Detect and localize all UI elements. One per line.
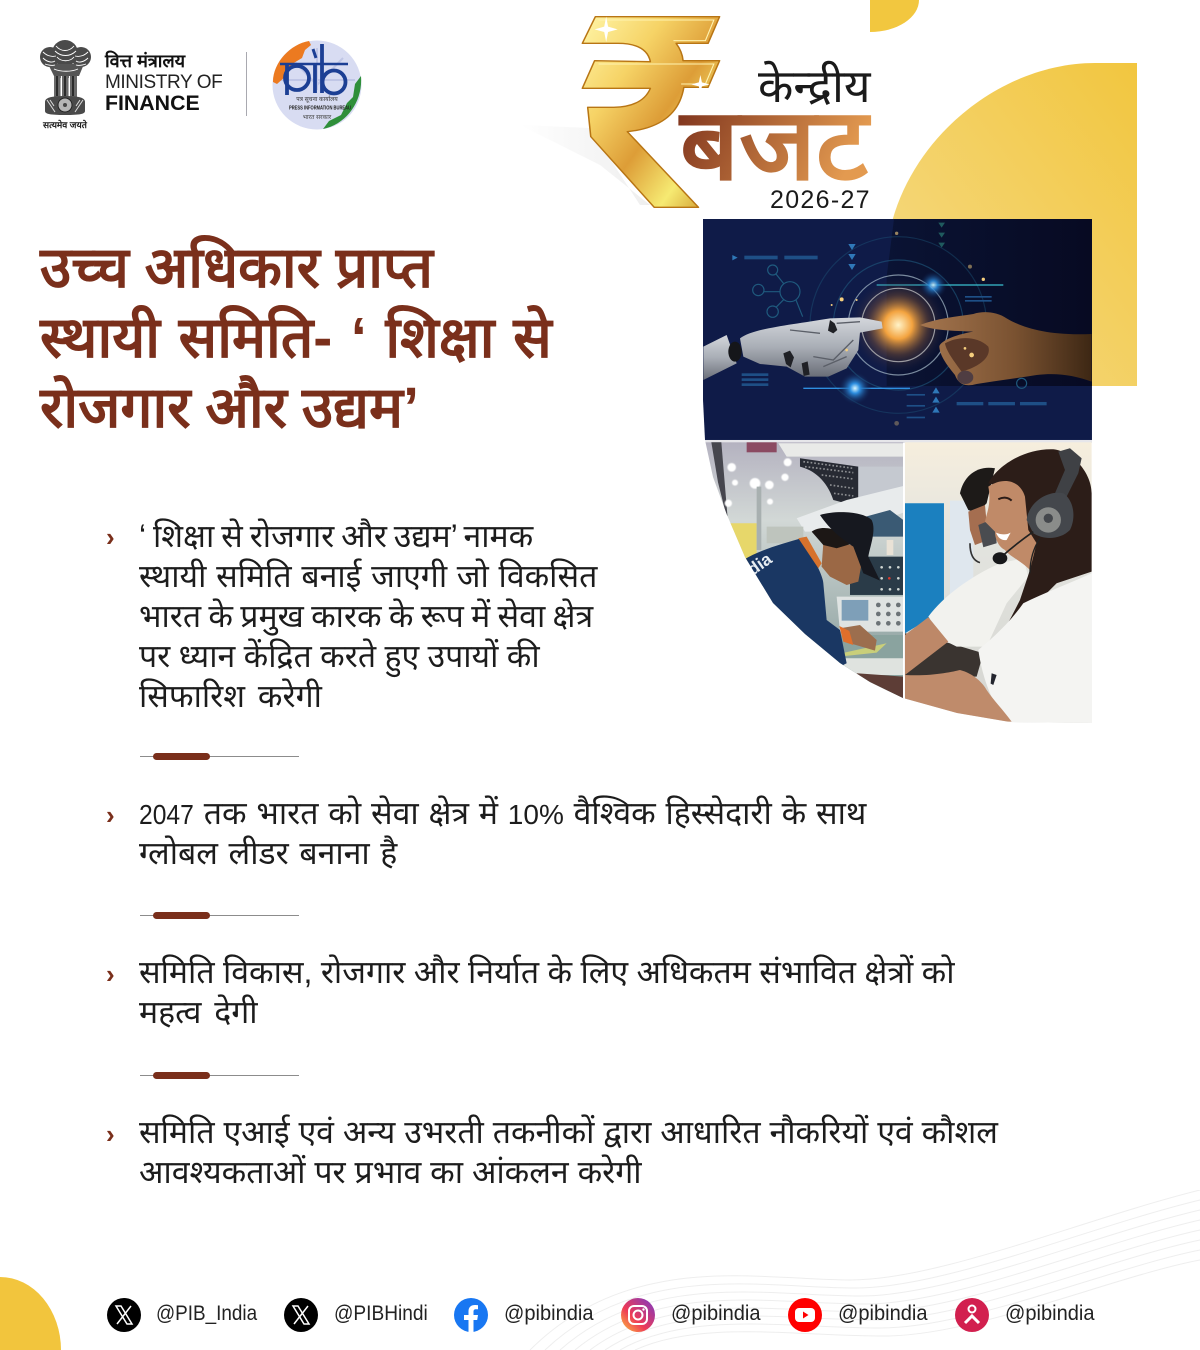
bullet 1 text: ‘ शिक्षा से रोजगार और उद्यम’ नामक — [139, 518, 533, 554]
bullet 3 text: महत्व देगी — [139, 994, 258, 1030]
bullet 3 text: समिति विकास, रोजगार और निर्यात के लिए अधिकतम संभावित क्षेत्रों को — [139, 954, 955, 990]
logo divider — [246, 52, 247, 116]
main title: स्थायी समिति- ‘ शिक्षा से — [40, 306, 552, 370]
bullet 2 text — [139, 795, 867, 871]
icon: gold rupee symbol — [582, 16, 720, 208]
bullet 1 — [106, 518, 598, 714]
divider 2 — [140, 912, 299, 919]
bullet 4 text: आवश्यकताओं पर प्रभाव का आंकलन करेगी — [139, 1154, 642, 1190]
chevron: › — [106, 522, 115, 552]
icon: YouTube — [788, 1298, 822, 1332]
bullet 4 — [106, 1114, 998, 1190]
chevron: › — [106, 800, 115, 830]
icon: Instagram — [621, 1298, 655, 1332]
bullet 1 text: भारत के प्रमुख कारक के रूप में सेवा क्षेत्र — [139, 598, 593, 634]
image: robot and human hands — [703, 219, 1092, 440]
icon: national emblem — [40, 40, 91, 115]
decorative quarter circle behind photos — [892, 63, 1137, 386]
decorative corner shape: bottom left — [0, 1277, 61, 1350]
bullet 4 text — [139, 1114, 998, 1190]
kendriya text: केन्द्रीय — [758, 60, 871, 112]
decorative corner shape: top — [870, 0, 919, 32]
icon: X — [107, 1298, 141, 1332]
icon: X — [284, 1298, 318, 1332]
icon: Koo — [955, 1298, 989, 1332]
bullet 2 text: 2047 — [139, 799, 194, 830]
main title — [39, 235, 554, 440]
handle: Instagram: @pibindia — [671, 1302, 761, 1325]
background wave pattern — [530, 1190, 1200, 1350]
bullet 1 text: सिफारिश करेगी — [139, 678, 322, 714]
bullet 2 — [106, 795, 867, 871]
handle: PIB India: @PIB_India — [156, 1302, 257, 1325]
photo collage — [703, 219, 1092, 723]
handle: Koo: @pibindia — [1005, 1302, 1095, 1325]
handle: PIB Hindi: @PIBHindi — [334, 1302, 428, 1325]
bullet 1 text: स्थायी समिति बनाई जाएगी जो विकसित — [139, 558, 597, 594]
pib logo — [272, 40, 362, 130]
bullet 4 text: समिति एआई एवं अन्य उभरती तकनीकों द्वारा आधारित नौकरियों एवं कौशल — [139, 1114, 998, 1150]
bullet 1 text — [139, 518, 598, 714]
bullet 3 text — [139, 954, 955, 1030]
image: technician at workbench: dia — [743, 548, 776, 579]
bullet 2 text: तक भारत को सेवा क्षेत्र में 10% वैश्विक हिस्सेदारी के साथ — [204, 795, 866, 831]
divider 3 — [140, 1072, 299, 1079]
social media footer — [107, 1298, 1095, 1332]
budget logo — [582, 16, 872, 214]
ministry name hindi: वित्त मंत्रालय — [105, 51, 185, 71]
ministry of finance logo — [40, 40, 222, 130]
pib tagline: पत्र सूचना कार्यालय — [296, 95, 338, 103]
ministry name english: MINISTRY OF — [105, 72, 222, 93]
handle: Facebook: @pibindia — [504, 1302, 594, 1325]
image: technician at workbench — [703, 442, 903, 703]
main title: रोजगार और उद्यम’ — [40, 376, 419, 440]
pib logo: भारत सरकार — [303, 115, 332, 121]
budget year: 2026-27 — [770, 186, 871, 214]
handle: YouTube: @pibindia — [838, 1302, 928, 1325]
main title: उच्च अधिकार प्राप्त — [40, 236, 433, 300]
finance wordmark: FINANCE — [105, 91, 200, 115]
bullet 2 text: ग्लोबल लीडर बनाना है — [139, 835, 397, 871]
bullet 1 text: पर ध्यान केंद्रित करते हुए उपायों की — [139, 638, 540, 674]
bullet 3 — [106, 954, 955, 1030]
chevron: › — [106, 1119, 115, 1149]
image: call centre agent with headset — [905, 442, 1092, 726]
divider 1 — [140, 753, 299, 760]
chevron: › — [106, 959, 115, 989]
emblem motto: सत्यमेव जयते — [43, 120, 87, 130]
icon: Facebook — [454, 1298, 488, 1332]
